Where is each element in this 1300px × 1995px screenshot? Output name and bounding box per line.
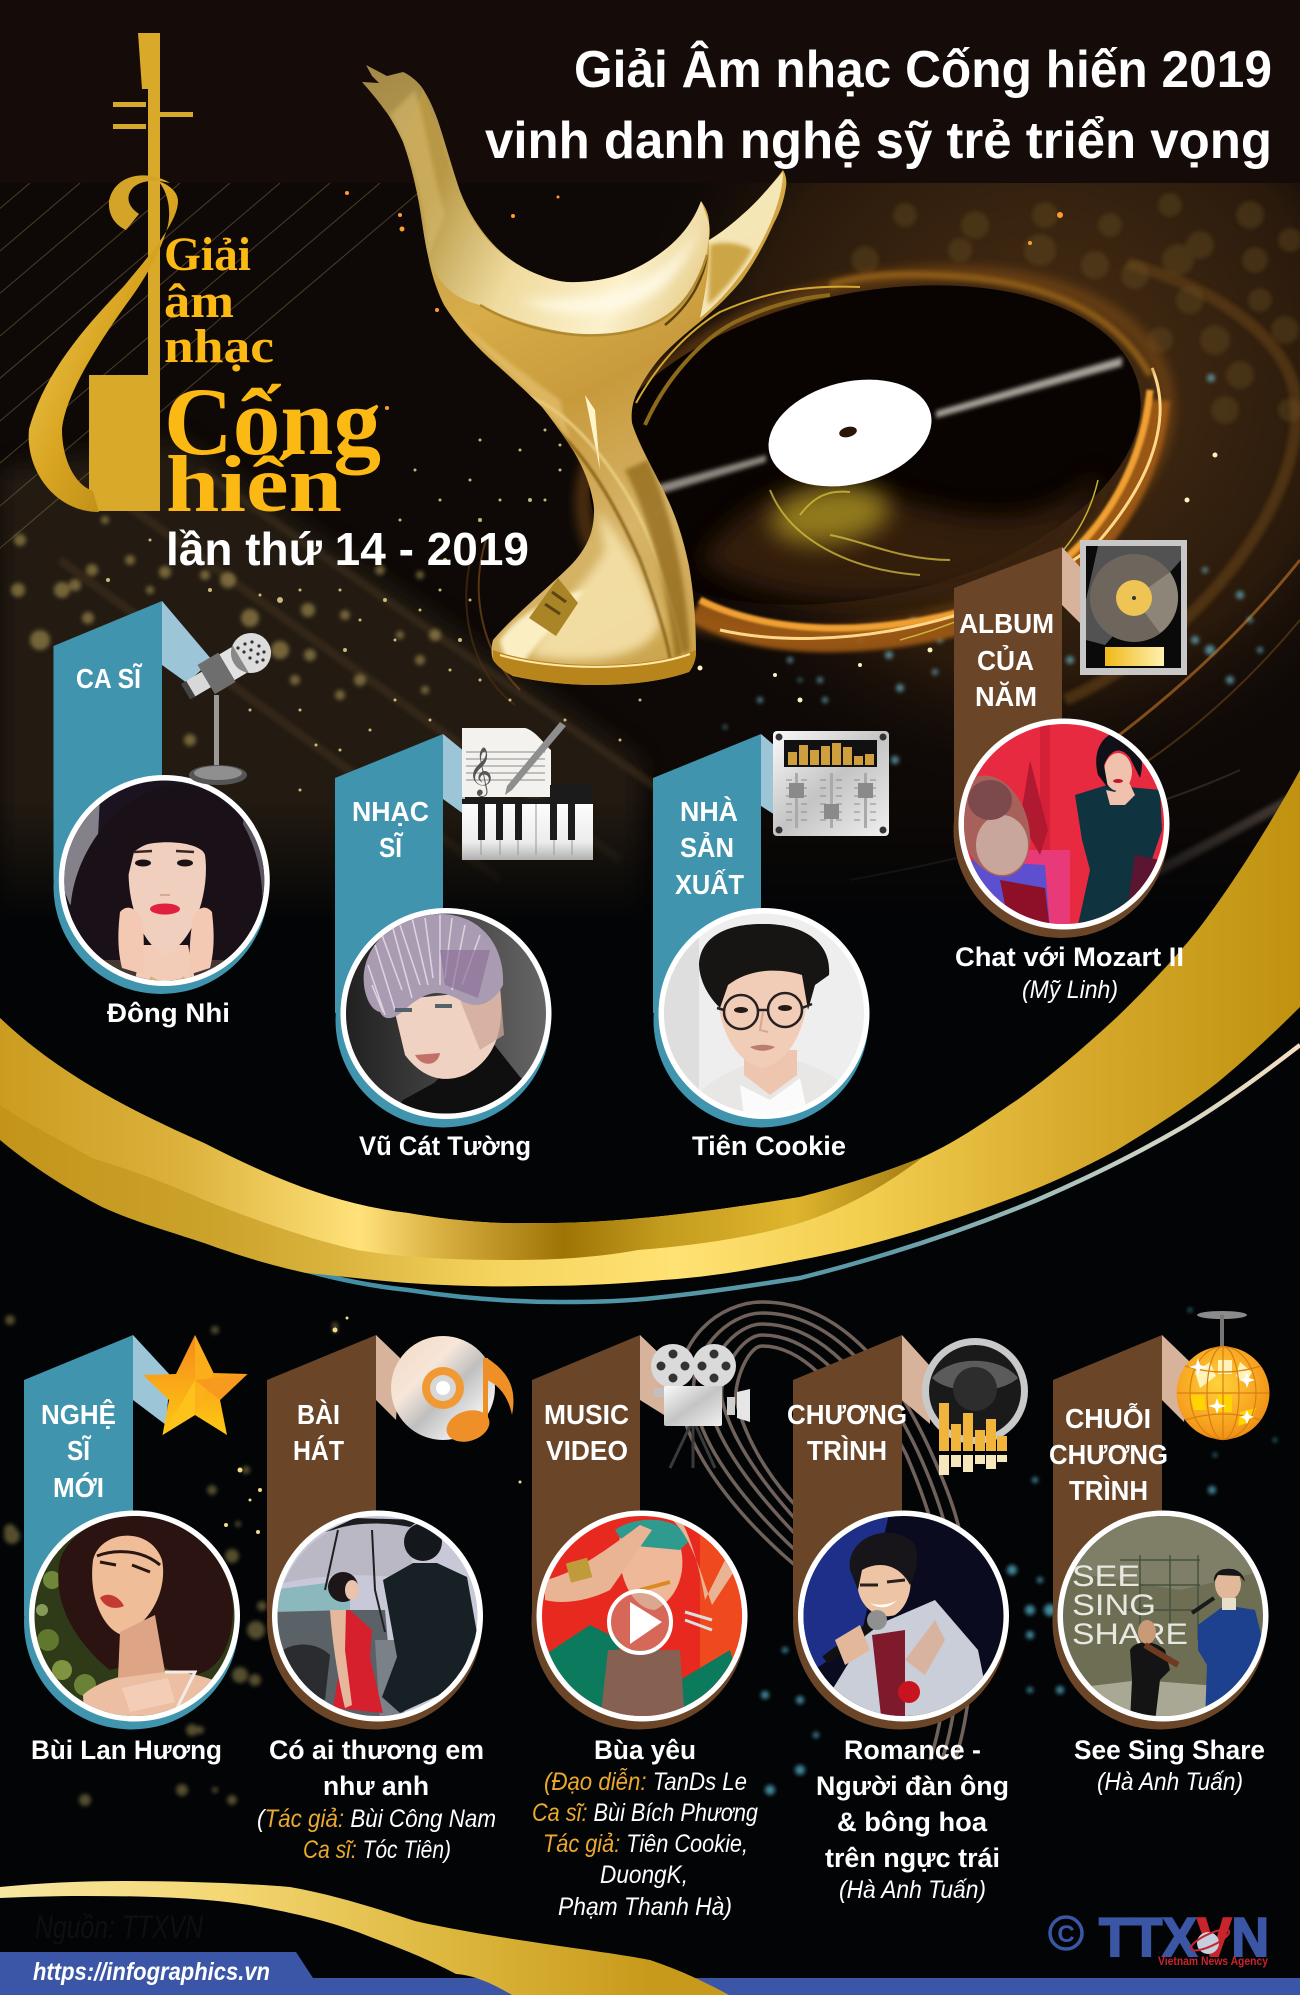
second wing [700, 172, 783, 318]
ribbon fold [133, 1335, 170, 1425]
award panel: Nghệ sĩ mới: MỚI [53, 1472, 104, 1503]
award panel: Chương trình: & bông hoa [837, 1807, 988, 1837]
award panel: Album của năm: CỦA [977, 644, 1034, 676]
copyright mark: C [1057, 1921, 1075, 1948]
award panel: Chương trình: TRÌNH [807, 1435, 887, 1466]
photo: Vũ Cát Tường [346, 914, 546, 1114]
award panel: Nghệ sĩ mới [24, 1335, 248, 1765]
song title: Có ai thương em [269, 1735, 484, 1765]
ribbon fold [902, 1335, 930, 1424]
category label: NGHỆ [41, 1399, 116, 1430]
award panel: Music video: DuongK, [600, 1861, 688, 1889]
ribbon fold [1062, 547, 1090, 628]
edition label: lần thứ 14 - 2019 [166, 523, 529, 575]
icon: speaker and equalizer [922, 1338, 1028, 1475]
thin line [255, 1045, 1300, 1302]
photo: Có ai thương em [278, 1516, 478, 1716]
instrument [29, 33, 193, 512]
category label: NHẠC [352, 796, 429, 827]
ribbon [24, 1335, 133, 1616]
ribbon fold [640, 1335, 668, 1415]
ribbon [1053, 1335, 1162, 1616]
award panel: Music video: Phạm Thanh Hà) [558, 1893, 732, 1921]
name: Chat với Mozart II [955, 942, 1184, 972]
award panel: Ca sĩ [54, 601, 278, 1028]
ribbon [653, 734, 761, 1013]
award panel: Bài hát: Ca sĩ: Tóc Tiên) [303, 1836, 451, 1864]
crescent [403, 89, 709, 335]
photo: Romance [804, 1516, 1004, 1716]
category label: CHUỖI [1065, 1403, 1151, 1434]
icon: star [143, 1335, 248, 1435]
ribbon [335, 734, 443, 1013]
award panel: Chuỗi chương trình: TRÌNH [1069, 1475, 1148, 1506]
award logo: đàn nguyệt and wordmark: nhạc [164, 320, 274, 373]
award panel: Bài hát: HÁT [293, 1435, 344, 1466]
disc [560, 238, 1170, 652]
source note: Nguồn: TTXVN [35, 1909, 204, 1945]
title [485, 40, 1272, 170]
name: Đông Nhi [107, 998, 230, 1028]
icon: disco ball [1176, 1311, 1270, 1440]
icon: audio mixer [773, 731, 889, 836]
category label: BÀI [297, 1399, 340, 1430]
award panel: Chương trình: Người đàn ông [816, 1771, 1009, 1801]
title: See Sing Share [1074, 1735, 1265, 1765]
category label: MUSIC [544, 1399, 629, 1430]
front band [0, 1018, 923, 1260]
photo: See Sing Share: SHARE [1072, 1618, 1188, 1651]
back band [0, 770, 1300, 1286]
category label: CA SĨ [76, 663, 143, 694]
category label: NHÀ [680, 796, 738, 827]
award panel: Album của năm [946, 540, 1187, 1004]
agency tagline: Vietnam News Agency [1158, 1954, 1268, 1968]
ribbon [954, 547, 1062, 824]
icon: music sheet and piano [462, 722, 593, 860]
shading clipped to silhouette [390, 89, 783, 685]
decorative bottom bokeh [4, 1308, 1277, 1806]
credits: (Đạo diễn: TanDs Le [544, 1767, 747, 1796]
award panel: Chuỗi chương trình [1049, 1311, 1270, 1796]
title: Giải Âm nhạc Cống hiến 2019 [574, 40, 1272, 99]
award logo: đàn nguyệt and wordmark: hiến [166, 441, 342, 529]
performer: (Mỹ Linh) [1022, 976, 1118, 1004]
ribbon [532, 1335, 640, 1616]
award panel: Chuỗi chương trình: CHƯƠNG [1049, 1439, 1168, 1470]
performer: (Hà Anh Tuấn) [839, 1876, 986, 1904]
award panel: Music video: VIDEO [546, 1435, 628, 1466]
award panel: Nhạc sĩ [335, 722, 593, 1161]
icon: microphone [175, 626, 278, 785]
golden trophy [362, 65, 786, 685]
icon: CD with music note [391, 1336, 513, 1447]
award panel: Music video: Tác giả: Tiên Cookie, [543, 1830, 748, 1858]
lower gold band of the ring [695, 400, 1158, 640]
play button [609, 1591, 671, 1653]
icon: film camera [651, 1344, 750, 1468]
photo: Bùi Lan Hương [34, 1516, 234, 1716]
award panel: Nhạc sĩ: SĨ [379, 832, 404, 863]
award panel: Music video [532, 1335, 758, 1921]
ribbon [793, 1335, 902, 1616]
globe [1188, 1926, 1232, 1954]
ribbon fold [761, 734, 775, 815]
performer: (Hà Anh Tuấn) [1097, 1768, 1243, 1796]
ribbon fold [162, 601, 212, 683]
award panel: Album của năm: NĂM [975, 681, 1037, 712]
ribbon fold [1162, 1335, 1190, 1422]
photo: See Sing Share [1063, 1516, 1263, 1716]
gold ribbon swoosh [0, 770, 1300, 1302]
ribbon fold [376, 1335, 400, 1420]
footer gold swoosh [0, 1881, 729, 1995]
hero backdrop: stripes, haze and bokeh [0, 183, 1300, 930]
wordmark: Giải [164, 228, 251, 281]
award panel: Chương trình: trên ngực trái [825, 1843, 1000, 1873]
icon: music sheet and piano: 𝄞 [468, 747, 493, 797]
award panel: Nhà sản xuất: XUẤT [675, 869, 744, 900]
copyright mark [1050, 1917, 1082, 1949]
footer band with URL [0, 1881, 1300, 1995]
award panel: Bài hát: như anh [323, 1771, 429, 1801]
award panel: Nghệ sĩ mới: SĨ [67, 1435, 92, 1466]
category label: CHƯƠNG [787, 1399, 907, 1430]
seam under crescent [480, 255, 707, 335]
singer in blue coat [1198, 1606, 1262, 1706]
record label [757, 363, 943, 503]
name: Tiên Cookie [692, 1131, 846, 1161]
violinist [1130, 1642, 1170, 1722]
agency logo [1050, 1906, 1269, 1968]
award panel: Bài hát [257, 1335, 513, 1864]
photo: See Sing Share: SEE [1072, 1560, 1140, 1593]
ribbon [267, 1335, 376, 1616]
award logo: đàn nguyệt and wordmark: Cống [164, 368, 381, 475]
title: Romance - [844, 1735, 981, 1765]
photo: Tiên Cookie [664, 914, 864, 1114]
concentric record grooves [679, 1302, 971, 1760]
icon: gold album frame [1080, 540, 1187, 675]
title: Bùa yêu [594, 1735, 696, 1765]
award panel: Nhà sản xuất: SẢN [680, 831, 734, 863]
credits: (Tác giả: Bùi Công Nam [257, 1805, 496, 1833]
photo: Chat với Mozart II [964, 724, 1164, 924]
award panel: Music video: Ca sĩ: Bùi Bích Phương [532, 1799, 758, 1827]
name: Vũ Cát Tường [359, 1131, 531, 1161]
head and neck shade [390, 90, 445, 256]
photo: Bùa yêu [542, 1516, 742, 1716]
wordmark: TTXVN [1099, 1906, 1269, 1968]
trophy plate [529, 578, 578, 636]
ribbon fold [443, 734, 465, 815]
photo: Đông Nhi [64, 780, 264, 980]
URL: https://infographics.vn [33, 1958, 270, 1986]
award logo: đàn nguyệt and wordmark [29, 33, 529, 575]
category label: ALBUM [959, 608, 1054, 639]
name: Bùi Lan Hương [31, 1735, 222, 1765]
photo: See Sing Share: SING [1072, 1589, 1156, 1622]
vinyl record with golden glow ring [544, 216, 1206, 694]
award panel: Nhà sản xuất [653, 731, 889, 1161]
title: vinh danh nghệ sỹ trẻ triển vọng [485, 112, 1272, 170]
stem highlights [585, 395, 600, 470]
award logo: đàn nguyệt and wordmark: âm [164, 275, 234, 328]
ribbon [54, 601, 162, 880]
award panel: Chương trình [787, 1335, 1028, 1904]
